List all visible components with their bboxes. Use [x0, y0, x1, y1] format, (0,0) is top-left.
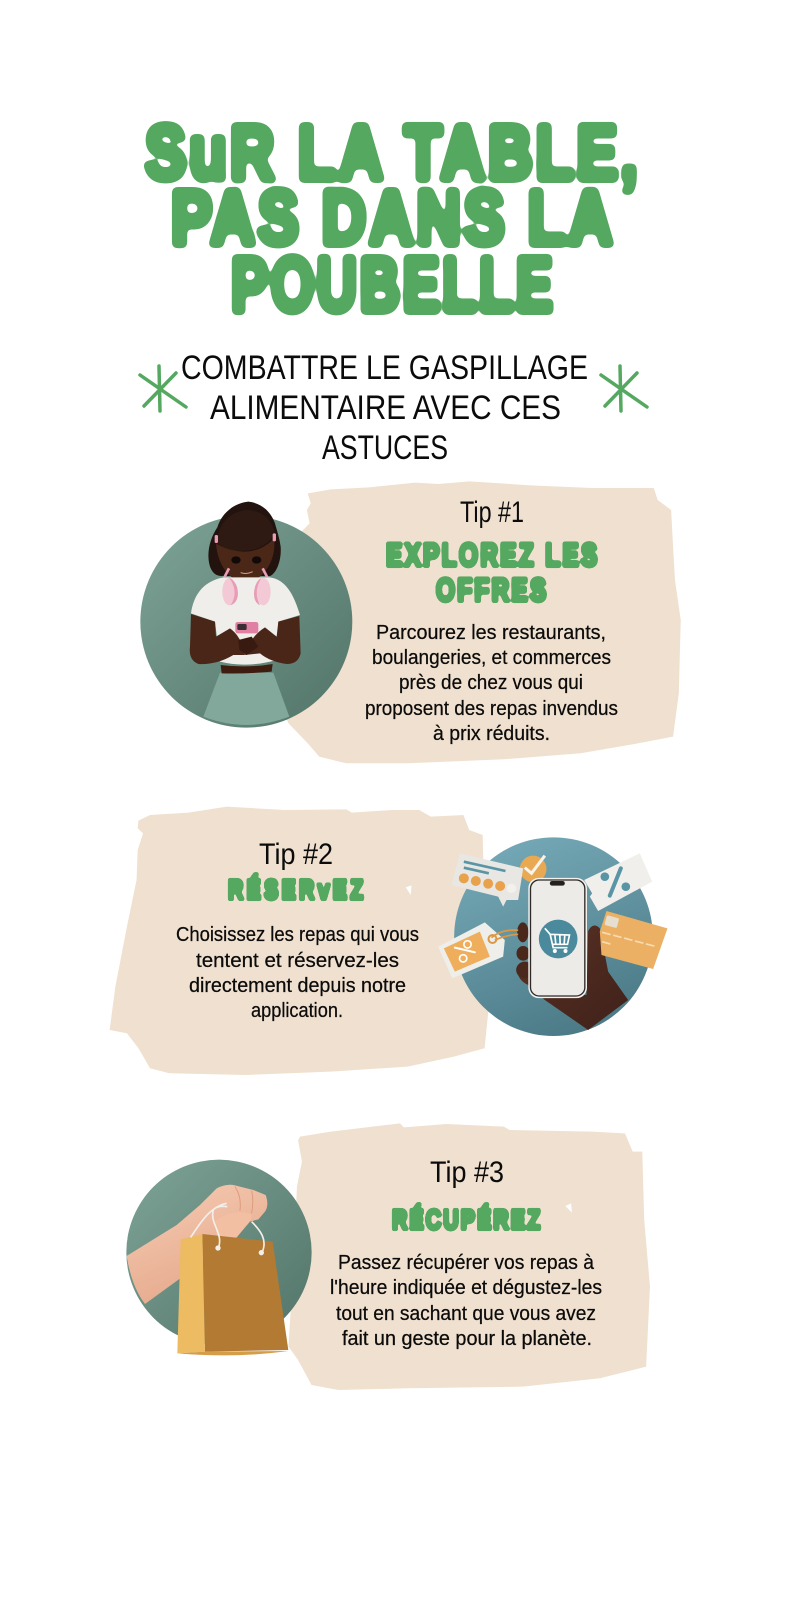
tip 1 text: Parcourez les restaurants, — [376, 622, 606, 644]
tip 1 text: proposent des repas invendus — [365, 698, 618, 720]
panel background 1 — [254, 481, 681, 763]
tip 1 text: EXPLOREZ LES — [386, 538, 597, 574]
tip 3 text: fait un geste pour la planète. — [342, 1328, 592, 1350]
tip 1 text: à prix réduits. — [433, 723, 550, 745]
subtitle: COMBATTRE LE GASPILLAGE — [181, 349, 588, 387]
tip 3 text: Tip #3 — [430, 1156, 504, 1189]
tip 1 text: près de chez vous qui — [399, 672, 583, 694]
illustration: woman with phone — [140, 502, 352, 728]
tip 2 text: RÉSERvEZ — [228, 873, 363, 906]
tip 2 text: Tip #2 — [259, 838, 333, 871]
panel: tip 1 — [140, 481, 681, 763]
tip 1 text: OFFRES — [436, 573, 546, 609]
panel background 3 — [288, 1123, 650, 1390]
title: SuR LA TABLE, — [145, 109, 638, 196]
tip 3 text: l'heure indiquée et dégustez-les — [330, 1277, 602, 1299]
tip 2 text: Choisissez les repas qui vous — [176, 924, 419, 946]
illustration: phone and shopping — [438, 837, 667, 1036]
panel: tip 3 — [126, 1123, 650, 1390]
title: PAS DANS LA — [171, 174, 613, 261]
tip 3 text: RÉCUPÉREZ — [392, 1203, 540, 1236]
tip 2 text — [176, 838, 419, 1022]
panel background 2 — [110, 807, 488, 1075]
icon: left asterisk — [140, 366, 186, 411]
tip 1 text — [365, 496, 618, 745]
title: POUBELLE — [231, 242, 553, 328]
illustration: hand with shopping bag — [126, 1160, 312, 1355]
subtitle — [181, 349, 588, 467]
tip 2 text: tentent et réservez-les — [196, 950, 399, 972]
tip 2 text: directement depuis notre — [189, 975, 406, 997]
tip 3 text — [330, 1156, 602, 1350]
tip 3 text: Passez récupérer vos repas à — [338, 1252, 595, 1274]
title — [145, 109, 638, 328]
subtitle: ALIMENTAIRE AVEC CES — [210, 389, 561, 427]
tip 2 text: application. — [251, 1000, 343, 1022]
subtitle: ASTUCES — [322, 429, 448, 467]
panel: tip 2 — [110, 807, 667, 1075]
tip 1 text: boulangeries, et commerces — [372, 647, 611, 669]
icon: right asterisk — [601, 366, 647, 411]
tip 3 text: tout en sachant que vous avez — [336, 1303, 596, 1325]
tip 1 text: Tip #1 — [460, 496, 524, 529]
